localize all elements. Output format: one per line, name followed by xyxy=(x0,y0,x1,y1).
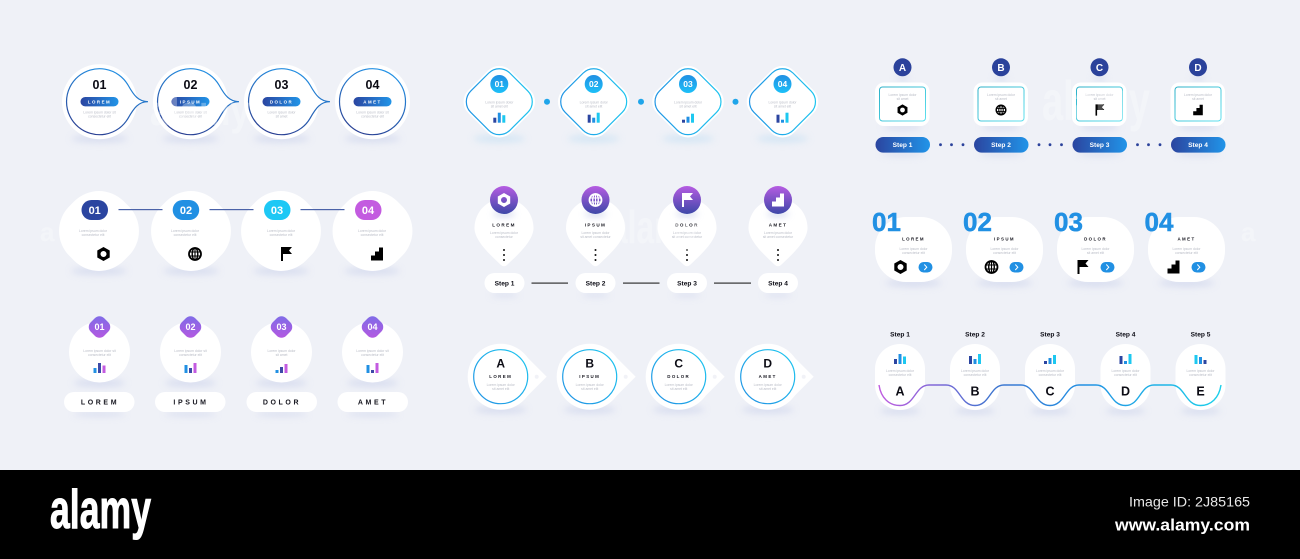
label pill AMET xyxy=(338,392,408,416)
pin DOLOR: sit amet consectetur xyxy=(672,235,703,239)
bubble 04: consectetur elit xyxy=(361,115,384,119)
circle C xyxy=(646,344,725,414)
bubble 03: sit amet xyxy=(276,115,287,119)
pin IPSUM: sit amet consectetur xyxy=(580,235,612,239)
pin IPSUM: IPSUM xyxy=(585,223,606,228)
circle C: sit amet elit xyxy=(670,387,687,391)
blob 03: Lorem ipsum dolor xyxy=(267,229,296,233)
bubble 04 xyxy=(335,64,410,143)
circle A: Lorem ipsum dolor xyxy=(487,383,516,387)
card A: sit amet xyxy=(897,97,908,101)
circle 01: 01 xyxy=(94,322,105,332)
bubble 04: AMET xyxy=(363,99,382,104)
pin IPSUM xyxy=(566,186,625,266)
squircle 01: 01 xyxy=(872,207,901,237)
watermark: a xyxy=(1241,217,1256,247)
capsule C: Step 3 xyxy=(1040,332,1060,338)
squircle 02: consectetur elit xyxy=(993,251,1016,255)
circle 02: Lorem ipsum dolor sit xyxy=(174,349,207,353)
diamond 02 xyxy=(551,59,636,144)
connector dots xyxy=(544,99,738,105)
card C: Lorem ipsum dolor xyxy=(1085,93,1114,97)
label pill DOLOR: DOLOR xyxy=(263,400,301,406)
pin LOREM: LOREM xyxy=(492,223,516,228)
bubble 01: 01 xyxy=(93,78,106,92)
circle A: sit amet elit xyxy=(492,387,509,391)
circle A: A xyxy=(496,357,505,371)
capsule A: consectetur elit xyxy=(889,373,911,377)
blob 01: Lorem ipsum dolor xyxy=(79,229,108,233)
squircle 03: Lorem ipsum dolor xyxy=(1081,247,1110,251)
capsule C: C xyxy=(1045,384,1055,398)
pin DOLOR xyxy=(658,186,716,266)
watermark: alamy xyxy=(150,87,251,134)
circle 03: sit amet xyxy=(276,353,287,357)
circle 01: Lorem ipsum dolor sit xyxy=(83,349,116,353)
circle D xyxy=(735,344,814,414)
circle B xyxy=(557,344,636,414)
panel: diamonds with round numbers xyxy=(457,59,825,144)
diamond 04 xyxy=(740,59,825,144)
bubble 02 xyxy=(153,64,239,143)
diamond 04: sit amet elit xyxy=(774,105,791,109)
capsule E: Lorem ipsum dolor xyxy=(1186,369,1215,373)
bubble 04: 04 xyxy=(366,78,379,92)
label pill LOREM xyxy=(64,392,134,416)
step button 4: Step 4 xyxy=(1188,142,1208,149)
card A: A xyxy=(899,63,906,74)
capsule C: Lorem ipsum dolor xyxy=(1036,369,1065,373)
diamond 03: Lorem ipsum dolor xyxy=(674,101,703,105)
circle 02: consectetur elit xyxy=(179,353,202,357)
diamond 01: 01 xyxy=(495,79,504,89)
squircle 02: 02 xyxy=(963,207,992,237)
pin LOREM: Lorem ipsum dolor xyxy=(490,231,519,235)
circle 04 xyxy=(342,314,403,387)
capsule A xyxy=(875,332,925,414)
card C xyxy=(1072,58,1126,130)
bubble 04: Lorem ipsum dolor sit xyxy=(356,111,389,115)
bubble 01: LOREM xyxy=(88,99,111,104)
watermark xyxy=(40,69,1256,253)
capsule E: Step 5 xyxy=(1191,332,1211,338)
label pill DOLOR xyxy=(246,392,317,416)
blob 04: consectetur elit xyxy=(361,233,383,237)
panel: speech bubble circles 01-04 xyxy=(62,64,410,143)
circle D: AMET xyxy=(759,374,777,379)
pin DOLOR: Lorem ipsum dolor xyxy=(673,231,702,235)
circle D: D xyxy=(763,357,772,371)
circle B: IPSUM xyxy=(579,374,600,379)
capsule B: Step 2 xyxy=(965,332,985,338)
blob 02: 02 xyxy=(180,205,192,217)
card B: sit amet xyxy=(995,97,1007,101)
bubble 01 xyxy=(62,64,148,143)
squircle 04: 04 xyxy=(1145,207,1174,237)
bubble 03: 03 xyxy=(275,78,288,92)
circle 02 xyxy=(160,314,221,387)
capsule D: D xyxy=(1121,384,1130,398)
capsule C xyxy=(1025,332,1075,414)
panel: lettered circles with arrows xyxy=(468,344,814,414)
circle D: Lorem ipsum dolor xyxy=(754,383,783,387)
diamond 02: sit amet elit xyxy=(585,105,602,109)
capsule B: B xyxy=(970,384,980,398)
bubble 01: Lorem ipsum dolor sit xyxy=(83,111,116,115)
panel: lettered cards with step pills xyxy=(875,58,1226,156)
squircle 03: 03 xyxy=(1054,207,1083,237)
circle 03: Lorem ipsum dolor xyxy=(267,349,296,353)
squircle 04: AMET xyxy=(1177,236,1196,242)
panel: circles with purple diamond badges xyxy=(64,314,408,416)
blob 02 xyxy=(137,177,245,285)
pin IPSUM: Lorem ipsum dolor xyxy=(581,231,610,235)
watermark: alamy xyxy=(1042,69,1150,132)
website: www.alamy.com xyxy=(1114,516,1250,534)
bubble 01: consectetur elit xyxy=(88,115,111,119)
step button 3 xyxy=(1072,137,1127,156)
card D: Lorem ipsum dolor xyxy=(1184,93,1213,97)
circle 04: 04 xyxy=(367,322,378,332)
capsule A: Lorem ipsum dolor xyxy=(886,369,915,373)
pin AMET: AMET xyxy=(769,223,787,228)
panel: capsules with wave line xyxy=(875,332,1226,414)
squircle 04: consectetur elit xyxy=(1175,251,1198,255)
step connector lines xyxy=(532,282,751,284)
blob 02: Lorem ipsum dolor xyxy=(171,229,200,233)
card A xyxy=(875,58,930,130)
pin DOLOR: DOLOR xyxy=(675,223,699,228)
diamond 04: Lorem ipsum dolor xyxy=(768,101,797,105)
alamy logo: alamy xyxy=(50,478,151,540)
circle 04: Lorem ipsum dolor sit xyxy=(356,349,389,353)
capsule C: consectetur elit xyxy=(1039,373,1061,377)
pin LOREM xyxy=(474,186,534,266)
card D: D xyxy=(1194,63,1202,74)
image id: Image ID: 2J85165 xyxy=(1129,494,1250,510)
squircle 01: LOREM xyxy=(902,236,925,242)
step button 3: Step 3 xyxy=(1090,142,1110,149)
diamond 04: 04 xyxy=(778,79,787,89)
step button 4 xyxy=(1171,137,1226,156)
wave line xyxy=(879,385,1221,406)
bubble 02: 02 xyxy=(184,78,197,92)
capsule B: consectetur elit xyxy=(964,373,986,377)
step pill 1: Step 1 xyxy=(495,280,515,287)
bubble 02: consectetur elit xyxy=(179,115,202,119)
circle B: sit amet elit xyxy=(581,387,598,391)
blob 01: 01 xyxy=(89,205,101,217)
circle D: sit amet elit xyxy=(759,387,776,391)
panel: pins with purple icon circles xyxy=(474,186,808,297)
bubble 02: IPSUM xyxy=(180,99,201,104)
diamond 01: sit amet elit xyxy=(491,105,508,109)
circle A: LOREM xyxy=(489,374,512,379)
card D: sit amet xyxy=(1192,97,1204,101)
circle B: B xyxy=(585,357,594,371)
card B xyxy=(974,58,1028,130)
circle 02: 02 xyxy=(185,322,196,332)
step pill 3 xyxy=(667,273,707,297)
step pill 4 xyxy=(758,273,798,297)
squircle 03 xyxy=(1054,207,1134,287)
blob 04: 04 xyxy=(362,205,375,217)
label pill LOREM: LOREM xyxy=(81,400,119,406)
pin AMET xyxy=(748,186,808,266)
squircle 04: Lorem ipsum dolor xyxy=(1172,247,1201,251)
diamond 03: 03 xyxy=(683,79,693,89)
step button 2: Step 2 xyxy=(991,142,1011,149)
card B: B xyxy=(997,63,1005,74)
squircle 01: Lorem ipsum dolor xyxy=(899,247,928,251)
blob 02: consectetur elit xyxy=(174,233,196,237)
step pill 2 xyxy=(576,273,616,297)
bubble 03 xyxy=(244,64,330,143)
capsule E xyxy=(1176,332,1226,414)
capsule A: A xyxy=(895,384,905,398)
diamond 03 xyxy=(646,59,730,144)
blob 04: Lorem ipsum dolor xyxy=(358,229,387,233)
circle 03: 03 xyxy=(276,322,287,332)
pin AMET: sit amet consectetur xyxy=(763,235,794,239)
squircle 02: IPSUM xyxy=(994,236,1015,242)
capsule D: consectetur elit xyxy=(1114,373,1137,377)
step button 1: Step 1 xyxy=(893,142,913,149)
circle B: Lorem ipsum dolor xyxy=(576,383,605,387)
circle A xyxy=(468,344,547,414)
circle C: DOLOR xyxy=(667,374,690,379)
bubble 03: DOLOR xyxy=(270,99,293,104)
card A: Lorem ipsum dolor xyxy=(888,93,917,97)
capsule D: Lorem ipsum dolor xyxy=(1111,369,1140,373)
diamond 02: 02 xyxy=(589,79,599,89)
blob 03: consectetur elit xyxy=(270,233,292,237)
step button 2 xyxy=(974,137,1028,156)
card C: C xyxy=(1096,63,1103,74)
pin LOREM: consectetur xyxy=(495,235,514,239)
squircle 01 xyxy=(872,207,952,287)
blob 03 xyxy=(227,177,335,285)
dotted connectors xyxy=(939,143,1161,146)
squircle 04 xyxy=(1145,207,1225,287)
circle 01: consectetur elit xyxy=(88,353,111,357)
diamond 03: sit amet elit xyxy=(679,105,697,109)
blob 04 xyxy=(318,177,427,285)
capsule D xyxy=(1100,332,1150,414)
step pill 4: Step 4 xyxy=(768,280,788,287)
capsule B: Lorem ipsum dolor xyxy=(961,369,990,373)
step pill 1 xyxy=(484,273,524,297)
squircle 03: DOLOR xyxy=(1084,236,1107,242)
diamond 01 xyxy=(457,59,542,144)
footer bar xyxy=(0,470,1300,559)
capsule B xyxy=(950,332,1000,414)
diamond 02: Lorem ipsum dolor xyxy=(580,101,609,105)
label pill IPSUM: IPSUM xyxy=(173,400,209,406)
panel: rounded blobs with number pills xyxy=(45,177,427,285)
blob 03: 03 xyxy=(271,205,283,217)
connector lines xyxy=(118,209,344,210)
squircle 02 xyxy=(963,207,1043,287)
squircle 03: sit amet elit xyxy=(1087,251,1104,255)
circle 03 xyxy=(251,314,312,387)
circle 01 xyxy=(69,314,130,387)
blob 01 xyxy=(45,177,153,285)
capsule A: Step 1 xyxy=(890,332,910,338)
capsule E: E xyxy=(1196,384,1205,398)
step pill 3: Step 3 xyxy=(677,280,697,287)
circle C: C xyxy=(674,357,683,371)
label pill IPSUM xyxy=(155,392,226,416)
diamond 01: Lorem ipsum dolor xyxy=(485,101,514,105)
card B: Lorem ipsum dolor xyxy=(987,93,1016,97)
squircle 02: Lorem ipsum dolor xyxy=(990,247,1019,251)
pin AMET: Lorem ipsum dolor xyxy=(764,231,793,235)
bubble 02: Lorem ipsum dolor sit xyxy=(174,111,207,115)
watermark: alamy xyxy=(610,201,700,253)
step pill 2: Step 2 xyxy=(586,280,606,287)
circle 04: consectetur elit xyxy=(361,353,384,357)
capsule E: consectetur elit xyxy=(1189,373,1212,377)
blob 01: consectetur elit xyxy=(82,233,104,237)
label pill AMET: AMET xyxy=(358,400,388,406)
bubble 03: Lorem ipsum dolor xyxy=(267,111,296,115)
card D xyxy=(1170,58,1225,130)
squircle 01: consectetur elit xyxy=(902,251,925,255)
watermark: a xyxy=(40,217,55,247)
step button 1 xyxy=(876,137,930,156)
capsule D: Step 4 xyxy=(1116,332,1136,338)
circle C: Lorem ipsum dolor xyxy=(665,383,694,387)
card C: sit amet xyxy=(1094,97,1105,101)
panel: squircles with large numbers xyxy=(872,207,1225,287)
